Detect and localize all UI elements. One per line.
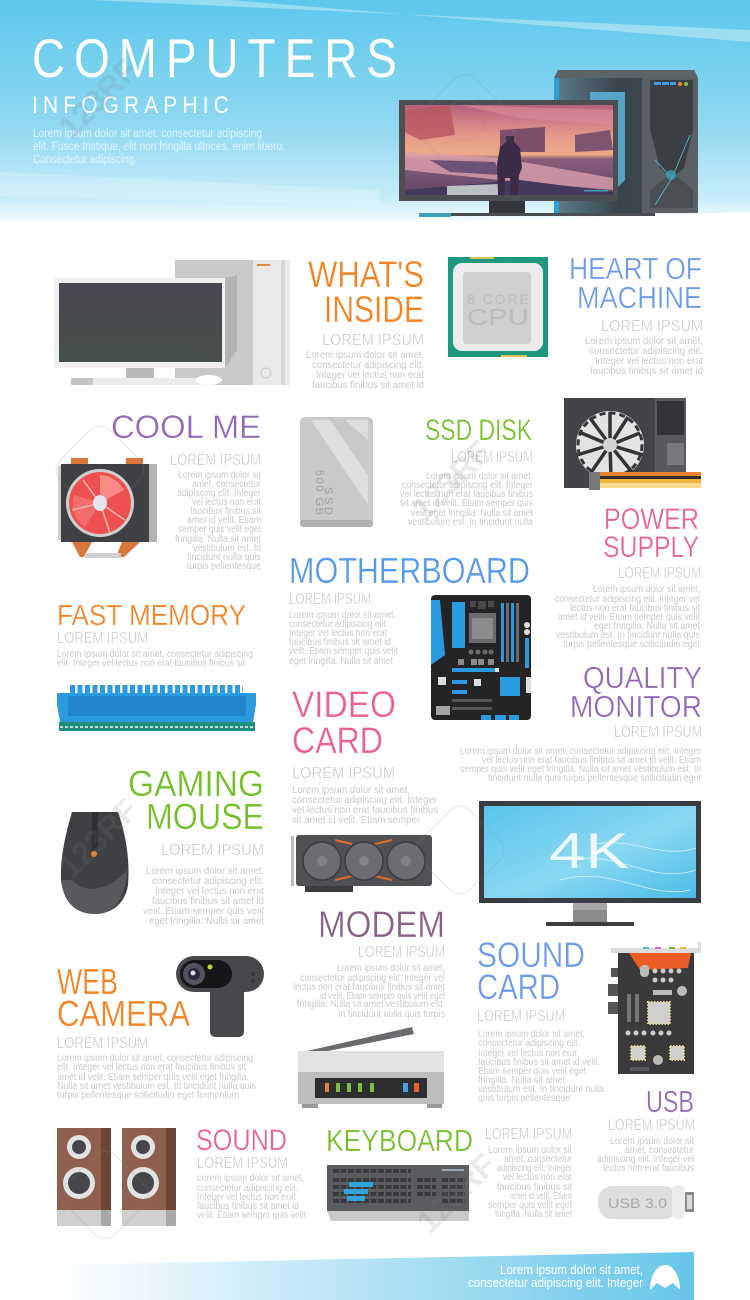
heading: MONITOR xyxy=(570,689,702,724)
text block xyxy=(57,1035,256,1101)
text block: faucibus finibus sit amet id xyxy=(152,895,264,907)
heading: FAST MEMORY xyxy=(57,600,246,632)
heading: SSD DISK xyxy=(425,414,532,447)
text block: tincidunt nulla quis xyxy=(187,551,261,563)
text block: eget fringilla. Nulla sit amet xyxy=(289,655,393,667)
header text block: elit. Fusce tristique, elit non fringilla ultrices, enim libero, xyxy=(33,141,285,153)
heading: VIDEO xyxy=(292,684,396,725)
text block: vel lectus non erat faucibus finibus sit amet id velit. Etiam xyxy=(482,754,701,766)
text block: Nulla sit amet vestibulum est. In tincidunt nulla quis xyxy=(57,1080,256,1092)
text block: Integer vel lectus non erat xyxy=(289,627,387,639)
text block: amet, consectetur xyxy=(504,1153,572,1165)
icon: sound card xyxy=(608,942,701,1074)
panel: heart of machine xyxy=(448,251,703,377)
text block: velit. Etiam semper quis velit xyxy=(143,905,264,917)
text block: LOREM IPSUM xyxy=(618,565,701,582)
heading xyxy=(570,660,702,724)
icon: gaming computer xyxy=(399,70,698,217)
watermark: 123RF xyxy=(409,1147,503,1240)
text block: semper quis velit eget fringilla. Nulla sit amet vestibulum est. In xyxy=(460,763,701,775)
text block: faucibus finibus sit xyxy=(497,1181,572,1193)
text block: fringilla. Nulla sit amet vestibulum est. xyxy=(297,998,445,1010)
text block: Integer vel lectus non erat xyxy=(595,355,703,367)
title: COMPUTERS xyxy=(32,27,406,89)
text block: LOREM IPSUM xyxy=(614,724,702,741)
text block: Integer vel lectus non erat xyxy=(478,1047,577,1059)
text block: semper quis velit eget xyxy=(178,523,261,535)
text block: Lorem ipsum dolor sit amet, xyxy=(337,962,445,974)
text block: LOREM IPSUM xyxy=(292,765,395,782)
header text block: Consectetur adipiscing. xyxy=(33,154,137,166)
panel: keyboard xyxy=(326,1123,572,1221)
icon: ssd xyxy=(300,417,373,527)
text block xyxy=(460,724,702,784)
text block: Etiam semper quis velit eget xyxy=(478,1065,586,1077)
heading xyxy=(128,763,264,837)
watermark: 123RF xyxy=(51,52,145,145)
heading xyxy=(57,961,190,1034)
text block: Lorem ipsum dolor sit amet, xyxy=(585,335,703,347)
text block: faucibus finibus sit amet id xyxy=(312,379,424,391)
heading: GAMING xyxy=(128,763,264,804)
text block xyxy=(293,944,445,1020)
text block: Lorem ipsum dolor sit xyxy=(610,1135,694,1147)
text block: tincidunt nulla quis turpis pellentesque sollicitudin eget xyxy=(488,772,701,784)
text block xyxy=(143,842,264,927)
icon: ssd: SSD xyxy=(322,487,334,515)
heading xyxy=(308,254,424,330)
text block xyxy=(292,765,438,826)
heading: CARD xyxy=(292,720,383,761)
text block: turpis pellentesque sollicitudin eget xyxy=(563,638,700,650)
text block: amet, consectetur xyxy=(192,478,261,490)
icon: power supply xyxy=(564,398,701,490)
panel: what's inside xyxy=(54,254,424,391)
text block: Lorem ipsum dolor sit xyxy=(178,469,261,481)
heading: HEART OF xyxy=(569,251,702,286)
text block: fringilla. Nulla sit amet xyxy=(495,1208,572,1220)
text block: velit. Etiam semper quis velit xyxy=(289,645,398,657)
text block: LOREM IPSUM xyxy=(289,591,371,608)
text block: faucibus finibus sit amet id xyxy=(197,1200,299,1212)
heading: INSIDE xyxy=(324,289,424,330)
text block: LOREM IPSUM xyxy=(322,332,424,349)
text block: eget fringilla. Nulla sit amet xyxy=(149,915,264,927)
text block: consectetur adipiscing elit. xyxy=(589,345,703,357)
icon: modem xyxy=(298,1027,444,1108)
heading: CARD xyxy=(477,968,560,1007)
heading: QUALITY xyxy=(583,660,702,695)
icon: ssd: 500 GB xyxy=(313,470,325,515)
text block: lectus non erat faucibus xyxy=(603,1162,694,1174)
text block: consectetur adipiscing elit. Integer xyxy=(292,794,437,806)
text block: LOREM IPSUM xyxy=(485,1126,572,1143)
heading: MOUSE xyxy=(146,796,264,837)
heading: SOUND xyxy=(477,936,585,975)
text block: LOREM IPSUM xyxy=(477,1008,565,1025)
text block: Lorem ipsum dolor sit amet, xyxy=(593,583,700,595)
heading: WHAT'S xyxy=(308,254,424,295)
icon: cpu xyxy=(448,257,548,357)
heading: COOL ME xyxy=(111,409,261,445)
text block: LOREM IPSUM xyxy=(451,449,533,466)
text block: vestibulum est. In tincidunt nulla xyxy=(478,1083,604,1095)
panel: sound card xyxy=(477,936,701,1104)
text block: adipiscing elit. Integer xyxy=(497,1162,572,1174)
text block: vestibulum est. In tincidunt nulla xyxy=(408,516,533,528)
text block: LOREM IPSUM xyxy=(170,452,261,469)
text block: amet id velit. Etiam semper quis velit xyxy=(558,611,700,623)
text block: LOREM IPSUM xyxy=(601,318,703,335)
footer text xyxy=(468,1263,643,1290)
text block: id velit. Etiam semper quis velit eget xyxy=(320,990,445,1002)
text block xyxy=(400,449,533,528)
text block: Integer vel lectus non erat xyxy=(316,369,424,381)
text block: adipiscing elit. Integer vel xyxy=(597,1153,694,1165)
text block: consectetur adipiscing elit. Integer vel xyxy=(555,593,700,605)
panel: gaming mouse xyxy=(61,763,264,927)
footer text: consectetur adipiscing elit. Integer xyxy=(468,1276,643,1290)
heading xyxy=(477,936,585,1007)
panel: sound xyxy=(57,1124,306,1226)
text block: Lorem ipsum dolor sit amet, xyxy=(289,609,396,621)
heading xyxy=(292,684,396,761)
text block xyxy=(289,591,398,667)
text block: vel lectus non erat faucibus finibus xyxy=(400,488,533,500)
text block xyxy=(197,1155,306,1221)
text block: faucibus finibus sit amet id velit. xyxy=(478,1056,600,1068)
text block: consectetur adipiscing elit. xyxy=(312,359,424,371)
text block: consectetur adipiscing elit. xyxy=(289,618,388,630)
text block: vel lectus non erat xyxy=(192,496,261,508)
text block: Integer vel lectus non erat xyxy=(155,885,264,897)
text block xyxy=(477,1008,604,1104)
heading xyxy=(569,251,702,315)
text block: faucibus finibus sit amet id xyxy=(590,365,703,377)
icon: logo xyxy=(650,1265,680,1290)
text block: Lorem ipsum dolor sit amet, xyxy=(146,865,264,877)
text block: faucibus finibus sit amet id xyxy=(289,636,391,648)
heading: KEYBOARD xyxy=(326,1123,473,1158)
text block: fringilla. Nulla sit amet xyxy=(478,1074,565,1086)
text block: vestibulum est. In xyxy=(193,542,261,554)
text block: Lorem ipsum dolor sit amet, xyxy=(426,470,533,482)
icon: white desktop computer xyxy=(54,260,290,385)
text block: sit amet id velit. Etiam semper quis xyxy=(400,497,533,509)
text block xyxy=(597,1117,695,1174)
text block xyxy=(585,318,703,377)
text block: semper quis velit eget xyxy=(488,1199,572,1211)
panel: quality monitor xyxy=(460,660,702,926)
heading: MACHINE xyxy=(577,280,702,315)
heading: POWER xyxy=(604,503,699,536)
text block: LOREM IPSUM xyxy=(57,630,148,647)
text block: lectus non erat faucibus finibus sit amet xyxy=(293,981,445,993)
panel: usb xyxy=(597,1084,695,1219)
text block: Lorem ipsum dolor sit xyxy=(488,1144,572,1156)
text block: Lorem ipsum dolor sit amet, xyxy=(197,1172,304,1184)
text block xyxy=(57,630,253,669)
text block xyxy=(170,452,261,572)
text block: elit. Integer vel lectus non erat faucibus finibus sit xyxy=(57,657,245,669)
text block: LOREM IPSUM xyxy=(358,944,445,961)
panel: video card xyxy=(291,684,438,892)
heading: CAMERA xyxy=(57,993,190,1034)
heading xyxy=(603,503,699,564)
text block: Lorem ipsum dolor sit amet, xyxy=(292,784,410,796)
text block: In tincidunt nulla quis turpis xyxy=(338,1008,445,1020)
watermark: 123RF xyxy=(404,434,498,527)
icon: cpu: CPU xyxy=(467,304,529,330)
panel: power supply xyxy=(555,398,701,650)
text block: consectetur adipiscing elit. xyxy=(197,1182,298,1194)
icon: graphics card xyxy=(291,835,432,892)
text block: Lorem ipsum dolor sit amet, xyxy=(306,349,424,361)
text block: vestibulum est. In tincidunt nulla quis xyxy=(556,629,700,641)
footer banner xyxy=(57,1252,694,1300)
text block: vel lectus non erat xyxy=(503,1171,572,1183)
watermark: 123RF xyxy=(51,792,145,885)
icon: mouse xyxy=(61,812,129,914)
text block: sit amet id velit. Etiam semper xyxy=(292,814,420,826)
text block: Integer vel lectus non erat xyxy=(197,1191,296,1203)
icon: usb drive: USB 3.0 xyxy=(608,1195,667,1211)
text block: quis turpis pellentesque xyxy=(478,1092,570,1104)
heading: WEB xyxy=(57,961,118,1002)
text block: vel lectus non erat faucibus finibus xyxy=(292,804,438,816)
text block: consectetur adipiscing elit. xyxy=(478,1037,580,1049)
panel: ssd disk xyxy=(300,414,533,528)
icon: cpu: 8 CORE xyxy=(467,291,529,307)
text block: LOREM IPSUM xyxy=(161,842,264,859)
text block: amet id velit. Etiam xyxy=(187,514,261,526)
text block xyxy=(306,332,424,391)
heading: SOUND xyxy=(196,1124,287,1157)
text block: velit eget fringilla. Nulla sit amet xyxy=(411,507,533,519)
text block: elit. Integer vel lectus non erat faucibus finibus sit xyxy=(57,1061,246,1073)
text block: turpis pellentesque sollicitudin eget fermentum xyxy=(57,1089,239,1101)
heading: SUPPLY xyxy=(603,531,699,564)
icon: cpu cooler xyxy=(58,458,157,558)
watermark xyxy=(51,52,522,1244)
text block: faucibus finibus sit xyxy=(190,505,261,517)
heading: MODEM xyxy=(318,904,445,945)
icon: 4k monitor xyxy=(479,801,701,926)
text block: adipiscing elit. Integer xyxy=(177,487,261,499)
header text block xyxy=(33,128,285,166)
text block: consectetur adipiscing elit. Integer xyxy=(402,479,533,491)
icon: 4k monitor: 4K xyxy=(549,823,629,879)
text block: LOREM IPSUM xyxy=(57,1035,148,1052)
text block xyxy=(555,565,701,650)
text block: consectetur adipiscing elit. Integer vel xyxy=(300,972,445,984)
heading: MOTHERBOARD xyxy=(289,550,530,591)
panel: motherboard xyxy=(289,550,531,720)
panel: web camera xyxy=(57,956,264,1101)
icon: motherboard xyxy=(431,595,531,720)
panel: fast memory xyxy=(57,600,256,731)
header background xyxy=(0,0,750,240)
text block: eget fringilla. Nulla sit amet xyxy=(594,620,700,632)
icon: keyboard xyxy=(327,1165,469,1221)
text block: Lorem ipsum dolor sit amet, consectetur adipiscing xyxy=(57,648,253,660)
text block: amet id velit. Etiam xyxy=(510,1190,572,1202)
panel: cool me xyxy=(58,409,261,572)
text block: LOREM IPSUM xyxy=(608,1117,695,1134)
subtitle: INFOGRAPHIC xyxy=(32,92,234,119)
heading: USB xyxy=(646,1084,694,1119)
text block: LOREM IPSUM xyxy=(197,1155,288,1172)
text block: Lorem ipsum dolor sit amet, xyxy=(478,1028,585,1040)
panel: modem xyxy=(293,904,445,1108)
text block: fringilla. Nulla sit amet xyxy=(175,533,261,545)
text block: turpis pellentesque xyxy=(187,560,261,572)
text block: Lorem ipsum dolor sit amet, consectetur adipiscing elit. Integer xyxy=(460,745,701,757)
text block: lectus non erat faucibus finibus sit xyxy=(570,602,700,614)
footer text: Lorem ipsum dolor sit amet, xyxy=(500,1263,643,1277)
text block: consectetur adipiscing elit. xyxy=(152,875,264,887)
text block: amet, consectetur xyxy=(625,1144,694,1156)
text block: Lorem ipsum dolor sit amet, consectetur adipiscing xyxy=(57,1052,253,1064)
text block: amet id velit. Etiam semper quis velit eget fringilla. xyxy=(57,1071,249,1083)
text block: velit. Etiam semper quis velit xyxy=(197,1209,306,1221)
text block xyxy=(485,1126,572,1220)
icon: speakers xyxy=(57,1128,176,1226)
tower xyxy=(554,70,698,213)
icon: webcam xyxy=(176,956,264,1037)
monitor xyxy=(399,100,655,217)
icon: ram stick xyxy=(57,689,256,731)
header text block: Lorem ipsum dolor sit amet, consectetur adipiscing xyxy=(33,128,262,140)
